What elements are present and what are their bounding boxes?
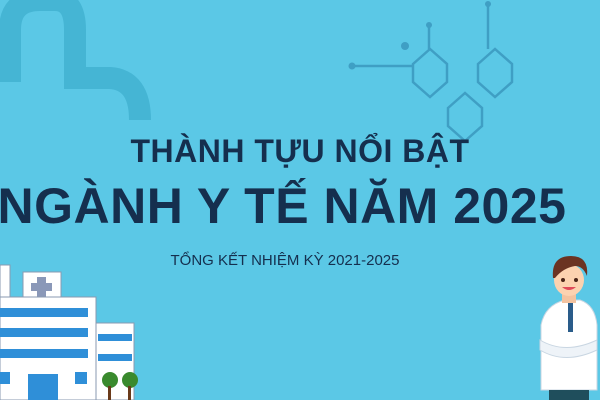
subtitle: TỔNG KẾT NHIỆM KỲ 2021-2025 — [170, 252, 399, 269]
illustration: hospital — [0, 264, 138, 400]
illustration: doctor — [540, 256, 598, 400]
title line 1: THÀNH TỰU NỔI BẬT — [130, 133, 470, 169]
title line 2: NGÀNH Y TẾ NĂM 2025 — [0, 178, 566, 234]
